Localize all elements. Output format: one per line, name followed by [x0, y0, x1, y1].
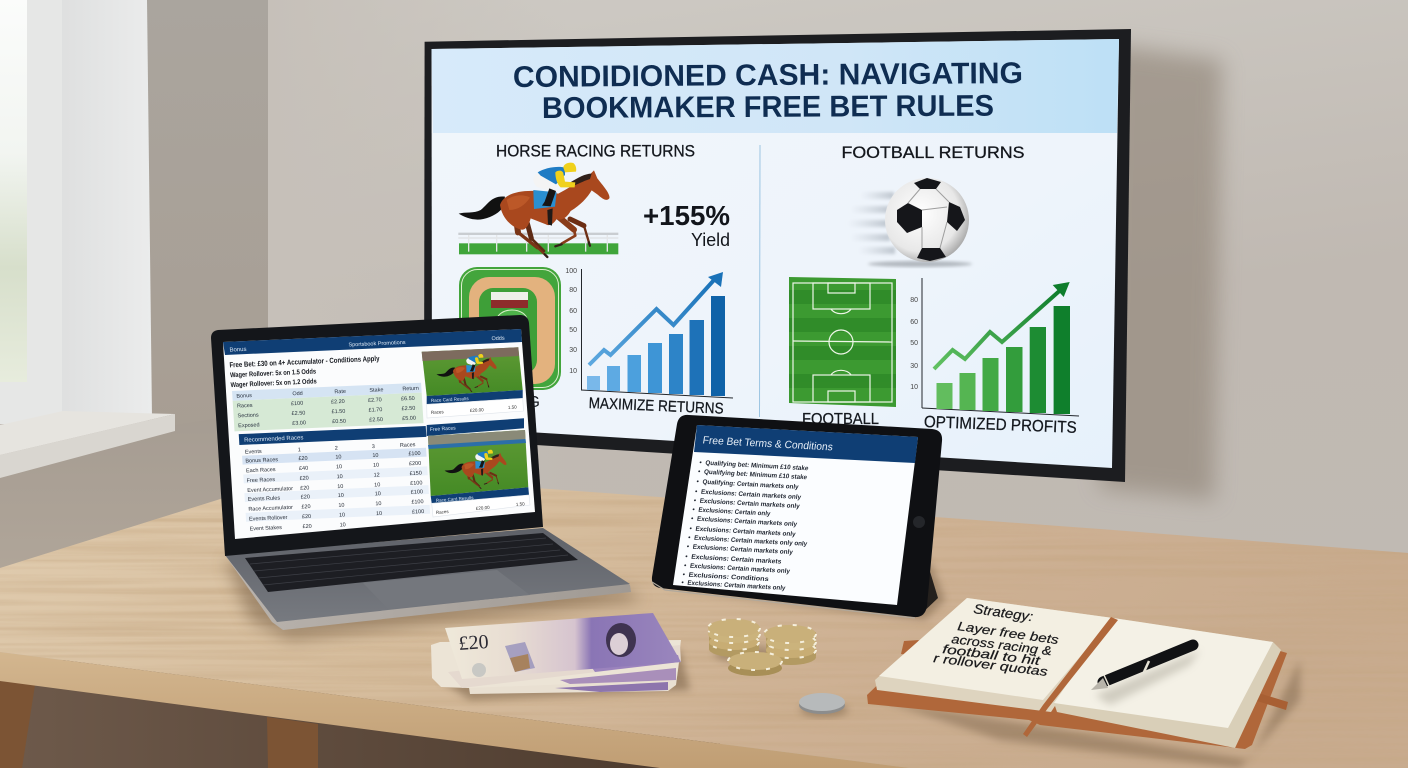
- laptop left column: tables: £20: [299, 476, 309, 482]
- laptop left column: tables: Exposed: [238, 422, 260, 429]
- laptop left column: tables: £20: [300, 485, 310, 492]
- laptop left column: tables: Wager Rollover: 5x on 1.5 Odds: [230, 369, 316, 379]
- laptop left column: tables: £100: [411, 499, 424, 506]
- laptop base: [225, 528, 631, 630]
- horse racing bar chart: maximize returns: 100: [565, 268, 577, 275]
- tablet bullet list: [681, 459, 819, 593]
- laptop right column: race cards: Races: [436, 509, 450, 515]
- racetrack diagram: RACING: [478, 394, 540, 411]
- gambling chips: [708, 619, 816, 676]
- laptop left column: tables: 10: [372, 453, 379, 459]
- title: CONDIDIONED CASH: NAVIGATING: [513, 57, 1023, 94]
- football bar chart: optimized profits: 10: [910, 384, 918, 391]
- laptop left column: tables: £200: [409, 461, 421, 467]
- monitor shadow on wall: [1100, 45, 1222, 500]
- title: BOOKMAKER FREE BET RULES: [542, 90, 994, 125]
- laptop left column: tables: Stake: [369, 387, 384, 394]
- laptop left column: tables: £40: [299, 466, 308, 472]
- laptop left column: tables: £100: [410, 480, 423, 487]
- ribbon: [1023, 617, 1118, 737]
- laptop left column: tables: 10: [374, 482, 381, 488]
- football pitch diagram: FOOTBALL: [802, 411, 879, 428]
- laptop left column: tables: £3.00: [292, 420, 306, 427]
- handwriting: [933, 601, 1060, 679]
- tablet bullet list: Exclusions: Certain markets only: [689, 563, 791, 575]
- football bar chart: optimized profits: 80: [910, 297, 918, 304]
- stat: +155% yield: [643, 200, 730, 250]
- notebook tabs: [901, 640, 919, 655]
- tablet bullet list: •: [688, 534, 692, 542]
- tablet: Free Bet Terms & Conditions: [702, 434, 834, 453]
- laptop left column: tables: £100: [412, 509, 424, 515]
- laptop right column: race cards: Free Races: [430, 425, 456, 433]
- laptop left column: tables: Rate: [334, 389, 346, 395]
- handwriting: Strategy:: [973, 601, 1034, 624]
- tablet bullet list: Qualifying bet: Minimum £10 stake: [704, 469, 808, 481]
- laptop left column: tables: £20: [301, 504, 311, 510]
- laptop left column: tables: 10: [338, 503, 345, 509]
- tablet bullet list: Exclusions: Certain markets only: [696, 516, 798, 528]
- side wall: [147, 0, 268, 600]
- title band: [432, 39, 1119, 133]
- laptop right column: race cards: £20.00: [470, 407, 484, 413]
- tablet bullet list: •: [698, 468, 702, 476]
- laptop left column: tables: 10: [339, 522, 346, 529]
- tablet bullet list: Exclusions: Conditions: [688, 572, 769, 583]
- laptop left column: tables: Odds: [491, 336, 505, 342]
- monitor: [424, 29, 1131, 482]
- laptop left column: tables: Events: [245, 449, 262, 456]
- window sill: [0, 411, 175, 478]
- laptop left column: tables: Free Bet: £30 on 4+ Accumulator - Conditions Apply: [229, 354, 380, 369]
- horse racing bar chart: maximize returns: 80: [569, 287, 577, 294]
- laptop left column: tables: 10: [338, 493, 344, 499]
- horse racing bar chart: maximize returns: 60: [569, 308, 577, 315]
- tablet bullet list: •: [682, 571, 686, 579]
- heading: football returns: FOOTBALL RETURNS: [842, 143, 1024, 162]
- laptop left column: tables: Odd: [292, 391, 303, 397]
- laptop left column: tables: Races: [237, 403, 253, 410]
- laptop left column: tables: £2.50: [401, 406, 416, 412]
- laptop left column: tables: 10: [339, 512, 345, 519]
- laptop left column: tables: £1.70: [368, 407, 383, 414]
- horse illustration with rail: [458, 163, 618, 257]
- laptop right column: race cards: Race Card Results: [431, 396, 470, 403]
- laptop left column: tables: Recommended Races: [244, 435, 304, 444]
- laptop left column: tables: Race Accumulator: [248, 505, 293, 513]
- tablet bullet list: Exclusions: Certain markets: [691, 554, 782, 566]
- wall left tone: [266, 0, 566, 540]
- laptop left column: tables: 10: [375, 501, 382, 507]
- laptop right column: race cards: [422, 347, 530, 517]
- chip stack left: [708, 619, 760, 657]
- laptop left column: tables: £6.50: [401, 396, 415, 402]
- stat: +155% yield: Yield: [691, 229, 730, 250]
- horse racing bar chart: maximize returns: MAXIMIZE RETURNS: [588, 395, 724, 418]
- football bar chart: optimized profits: 30: [910, 363, 918, 370]
- horse racing bar chart: maximize returns: 30: [569, 347, 577, 354]
- laptop left column: tables: £20: [302, 514, 311, 520]
- tablet bullet list: •: [685, 553, 689, 561]
- tablet bullet list: •: [696, 478, 700, 486]
- laptop left column: tables: [228, 336, 516, 533]
- laptop left column: tables: 10: [373, 463, 379, 469]
- laptop right column: race cards: 1.50: [516, 501, 525, 507]
- under sill wall: [0, 410, 268, 600]
- handwriting: across racing &: [951, 632, 1053, 658]
- laptop left column: tables: £2.20: [331, 399, 345, 405]
- monitor screen: [432, 39, 1119, 468]
- laptop right column: race cards: Race Card Results: [436, 495, 474, 503]
- handwriting: Layer free bets: [957, 619, 1060, 647]
- laptop left column: tables: £2.70: [368, 397, 382, 404]
- banknotes: £20: [458, 631, 489, 655]
- tablet bullet list: Exclusions: Certain markets only: [687, 580, 786, 592]
- laptop left column: tables: Sections: [237, 413, 259, 419]
- horse racing bar chart: maximize returns: 10: [569, 368, 577, 375]
- tablet bullet list: •: [686, 543, 690, 551]
- laptop left column: tables: Bonus Races: [245, 457, 279, 464]
- monitor bezel: [424, 29, 1131, 482]
- right page: [1054, 618, 1281, 748]
- laptop lid: [211, 315, 543, 556]
- tablet shadow: [660, 560, 945, 620]
- tablet body: [652, 415, 942, 617]
- laptop left column: tables: £5.00: [402, 416, 416, 422]
- silver coin: [799, 693, 848, 717]
- pen: [1091, 645, 1200, 705]
- laptop left column: tables: £2.50: [369, 417, 383, 424]
- chip stack front: [728, 652, 782, 676]
- laptop left column: tables: 10: [336, 474, 343, 480]
- floor under desk: [0, 660, 720, 768]
- chip stack right: [764, 625, 816, 665]
- laptop left column: tables: Bonus: [229, 347, 247, 354]
- laptop left column: tables: £1.50: [331, 409, 346, 415]
- tablet bullet list: Qualifying bet: Minimum £10 stake: [705, 460, 809, 472]
- football bar chart: optimized profits: [910, 278, 1079, 437]
- handwriting: football to hit: [942, 642, 1041, 668]
- football bar chart: optimized profits: OPTIMIZED PROFITS: [924, 413, 1077, 437]
- tablet bullet list: •: [695, 488, 699, 496]
- tablet bullet list: •: [690, 515, 694, 523]
- tablet bullet list: •: [693, 497, 697, 505]
- horse racing bar chart: maximize returns: 50: [569, 327, 577, 334]
- laptop left column: tables: 10: [335, 454, 342, 461]
- laptop left column: tables: 1: [298, 447, 301, 453]
- laptop left column: tables: £20: [301, 494, 310, 501]
- left page: [875, 598, 1113, 712]
- banknote shadow: [440, 650, 690, 700]
- football pitch diagram: [789, 277, 896, 428]
- laptop left column: tables: Each Races: [246, 467, 276, 474]
- laptop left column: tables: Return: [402, 386, 419, 392]
- banknotes: [431, 613, 681, 694]
- desk legs: [0, 681, 318, 768]
- laptop left column: tables: 10: [337, 484, 344, 490]
- notebook: [867, 598, 1300, 768]
- laptop left column: tables: Events Rollover: [249, 515, 288, 523]
- laptop left column: tables: £0.50: [332, 419, 346, 425]
- football bar chart: optimized profits: 60: [910, 319, 918, 326]
- laptop left column: tables: Races: [400, 442, 416, 449]
- window recess: [58, 0, 152, 418]
- laptop left column: tables: Events Rules: [248, 496, 281, 503]
- laptop left column: tables: 10: [336, 464, 342, 470]
- tablet bullet list: •: [689, 525, 693, 533]
- laptop left column: tables: Event Stakes: [249, 525, 282, 532]
- laptop left column: tables: £20: [298, 456, 308, 462]
- title: [513, 57, 1023, 125]
- tablet bullet list: Exclusions: Certain only: [698, 507, 771, 518]
- laptop left column: tables: Event Accumulator: [247, 486, 293, 494]
- tablet bullet list: Qualifying: Certain markets only: [702, 479, 799, 491]
- football with motion lines: [847, 178, 972, 267]
- laptop left column: tables: Wager Rollover: 5x on 1.2 Odds: [230, 378, 317, 389]
- handwriting: r rollover quotas: [933, 651, 1048, 679]
- laptop left column: tables: Free Races: [246, 477, 275, 484]
- laptop left column: tables: 10: [376, 511, 382, 517]
- laptop left column: tables: 10: [375, 491, 381, 497]
- laptop left column: tables: £20: [302, 524, 312, 530]
- laptop left column: tables: £100: [411, 489, 423, 496]
- notebook cover: [867, 607, 1287, 749]
- laptop left column: tables: £150: [409, 471, 422, 477]
- stat: +155% yield: +155%: [643, 200, 730, 231]
- tablet bullet list: Exclusions: Certain markets only: [695, 526, 796, 538]
- tablet: [652, 415, 942, 618]
- laptop left column: tables: Sportsbook Promotions: [348, 340, 406, 348]
- laptop left column: tables: 2: [335, 446, 338, 452]
- tablet screen: [673, 425, 918, 605]
- window frame: [0, 0, 62, 424]
- tablet bullet list: •: [681, 579, 685, 587]
- football bar chart: optimized profits: 50: [910, 340, 918, 347]
- laptop: [211, 315, 631, 630]
- racetrack diagram: [459, 267, 561, 411]
- tablet bullet list: Exclusions: Certain markets only: [699, 498, 801, 510]
- tablet bullet list: Exclusions: Certain markets only only: [694, 535, 808, 548]
- tablet bullet list: •: [692, 506, 696, 514]
- desk top and front edge: [0, 468, 1408, 768]
- tablet stand: [905, 555, 938, 617]
- laptop right column: race cards: £20.00: [476, 505, 490, 511]
- laptop left column: tables: 12: [373, 472, 380, 479]
- window glass: [0, 0, 27, 382]
- tablet bullet list: Exclusions: Certain markets only: [701, 489, 802, 501]
- laptop left column: tables: 3: [372, 444, 375, 450]
- laptop left column: tables: £2.50: [291, 410, 306, 417]
- laptop right column: race cards: Races: [431, 409, 445, 415]
- laptop shadow: [225, 560, 640, 640]
- heading: horse racing returns: HORSE RACING RETURNS: [496, 142, 695, 160]
- laptop left column: tables: £100: [291, 401, 303, 407]
- tablet bullet list: •: [683, 562, 687, 570]
- tablet bullet list: •: [699, 459, 703, 467]
- laptop left column: tables: Bonus: [236, 393, 252, 400]
- tablet bullet list: Exclusions: Certain markets only: [692, 544, 794, 556]
- horse racing bar chart: maximize returns: [565, 268, 733, 418]
- laptop right column: race cards: 1.50: [508, 404, 517, 410]
- laptop screen: [223, 329, 535, 539]
- laptop left column: tables: £100: [408, 451, 421, 457]
